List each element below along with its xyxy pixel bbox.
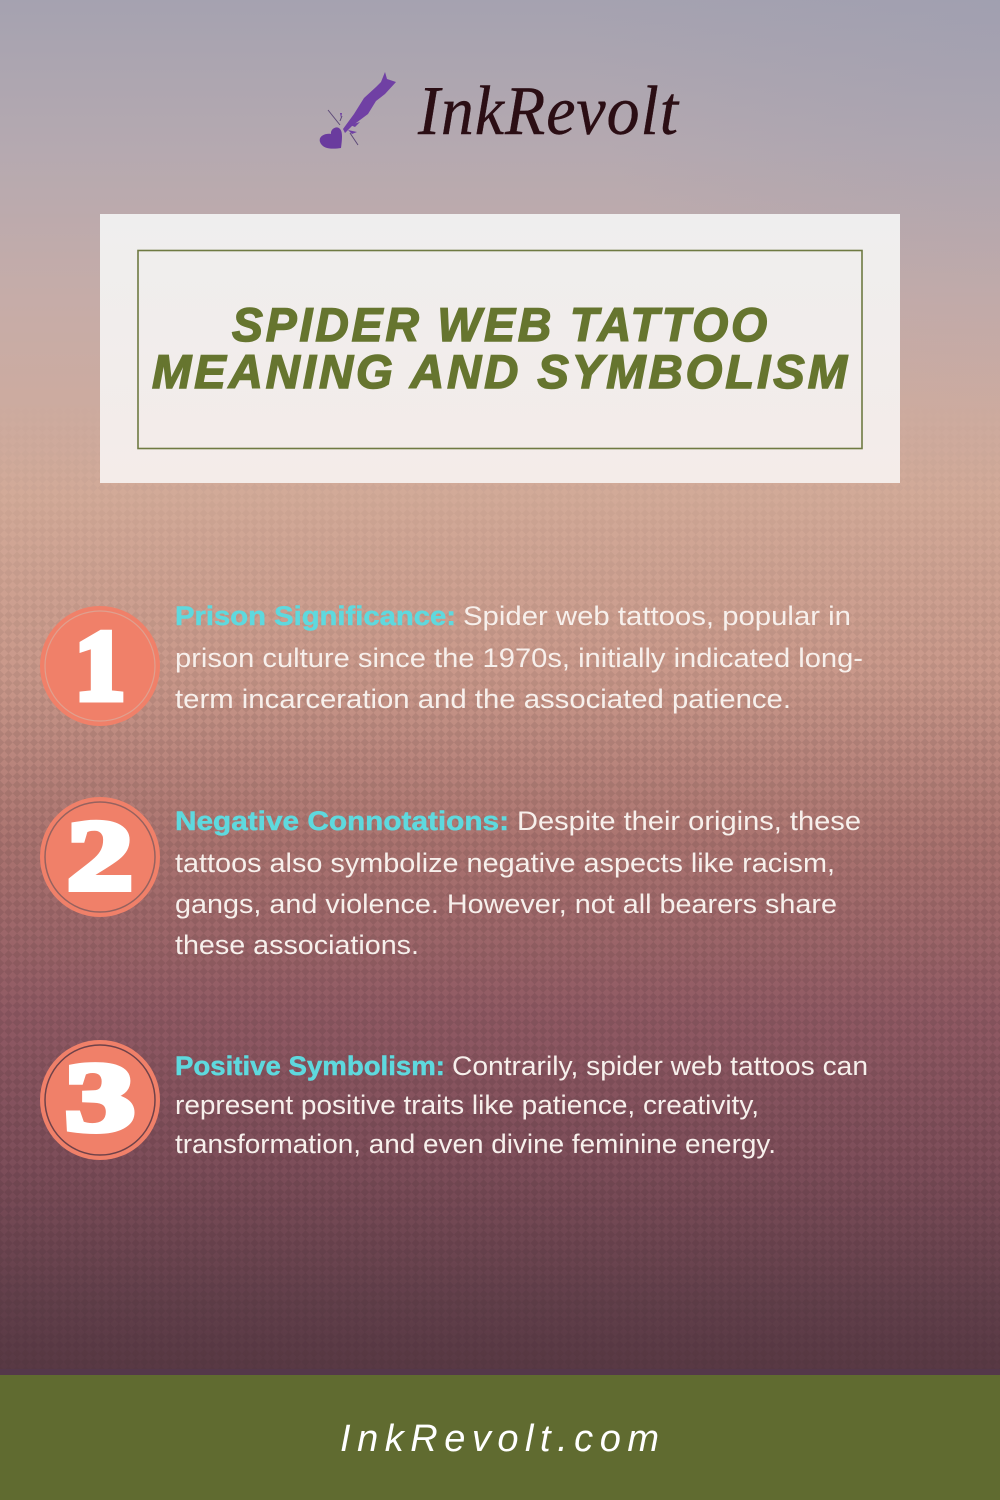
text block 2 bbox=[175, 806, 861, 960]
text block 3: Contrarily, spider web tattoos can bbox=[452, 1051, 868, 1081]
text block 2: these associations. bbox=[175, 930, 419, 960]
text block 1: Prison Significance: bbox=[175, 601, 456, 631]
icon: ink pen logo with heart bbox=[320, 72, 396, 149]
text block 3 bbox=[175, 1051, 868, 1159]
number badge 3: 3 bbox=[65, 1044, 135, 1152]
item 3: positive symbolism bbox=[40, 1040, 868, 1160]
item 1: prison significance bbox=[40, 601, 863, 726]
text block 3: represent positive traits like patience, creativity, bbox=[175, 1090, 759, 1120]
title text: MEANING AND SYMBOLISM bbox=[152, 345, 850, 398]
text block 2: tattoos also symbolize negative aspects like racism, bbox=[175, 848, 835, 878]
text block 1 bbox=[175, 601, 863, 714]
number badge 2 bbox=[40, 797, 160, 917]
item 2: negative connotations bbox=[40, 797, 861, 960]
title panel bbox=[100, 214, 900, 483]
text block 1: term incarceration and the associated patience. bbox=[175, 684, 791, 714]
number badge 2: 2 bbox=[67, 800, 133, 911]
number badge 3 bbox=[40, 1040, 160, 1160]
text block 2: Negative Connotations: bbox=[175, 806, 509, 836]
text block 1: prison culture since the 1970s, initially indicated long- bbox=[175, 643, 863, 673]
text block 3: Positive Symbolism: bbox=[175, 1051, 445, 1081]
title text: SPIDER WEB TATTOO bbox=[232, 298, 770, 351]
text block 3: transformation, and even divine feminine energy. bbox=[175, 1129, 776, 1159]
footer band bbox=[0, 1375, 1000, 1500]
logo wordmark: InkRevolt bbox=[417, 73, 680, 150]
title frame bbox=[138, 250, 862, 448]
footer url: InkRevolt.com bbox=[340, 1418, 659, 1460]
text block 2: Despite their origins, these bbox=[517, 806, 861, 836]
title text bbox=[152, 298, 850, 398]
number badge 1: 1 bbox=[75, 610, 125, 721]
text block 1: Spider web tattoos, popular in bbox=[463, 601, 851, 631]
number badge 1 bbox=[40, 606, 160, 726]
text block 2: gangs, and violence. However, not all bearers share bbox=[175, 889, 837, 919]
